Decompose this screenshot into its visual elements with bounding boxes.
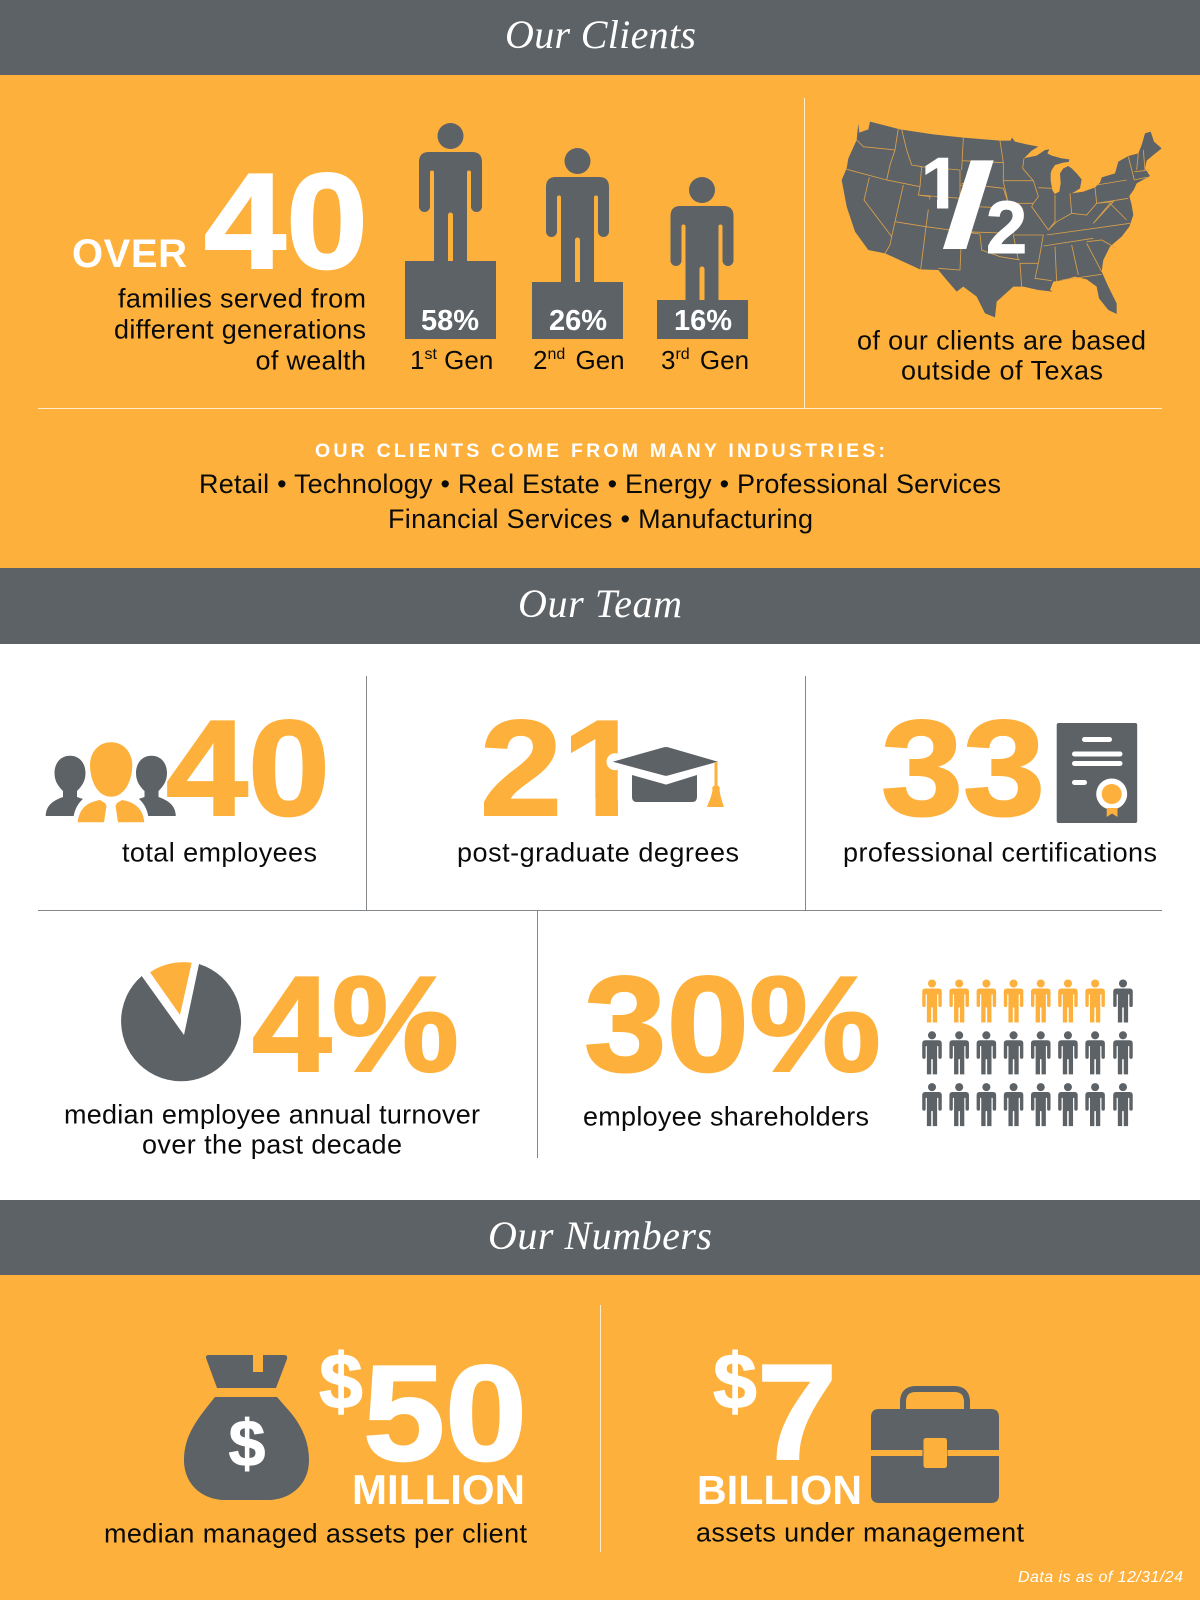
- stat: 33 professional certifications: professional certifications: [843, 838, 1157, 868]
- stat: $7 billion: 7: [757, 1336, 837, 1488]
- stat: 40 total employees: total employees: [122, 838, 317, 868]
- text block: industries: OUR CLIENTS COME FROM MANY INDUSTRIES:: [315, 440, 885, 462]
- stat: over 40 families: different generations: [114, 314, 366, 344]
- first generation figure: st: [424, 346, 437, 363]
- stat: 40 total employees: 40: [166, 692, 330, 844]
- map: half of clients outside Texas: 1: [921, 144, 961, 224]
- stat: $7 billion: [696, 1336, 1024, 1548]
- heading: Our Clients: Our Clients: [505, 12, 696, 57]
- stat: 21 post-graduate degrees: [457, 692, 739, 868]
- third generation figure: rd: [675, 346, 690, 363]
- stat: 30% shareholders: 30%: [584, 948, 881, 1100]
- chart: generations: [405, 123, 749, 375]
- stat: over 40 families: 40: [204, 145, 368, 297]
- icon: certificate: [1057, 723, 1137, 823]
- chart: pie turnover: [121, 962, 241, 1081]
- heading: Our Team: [0, 568, 1200, 644]
- icon: money bag: $: [229, 1406, 265, 1480]
- third generation figure: [657, 177, 749, 375]
- stat: 21 post-graduate degrees: post-graduate degrees: [457, 838, 739, 868]
- second generation figure: nd: [547, 346, 565, 363]
- third generation figure: 16%: [674, 305, 732, 337]
- heading: Our Numbers: Our Numbers: [488, 1213, 712, 1258]
- map: half of clients outside Texas: /: [941, 140, 996, 272]
- second generation figure: 26%: [549, 305, 607, 337]
- stat: over 40 families: families served from: [118, 284, 366, 314]
- icon: briefcase: [871, 1389, 999, 1503]
- stat: 4% turnover: median employee annual turnover: [64, 1100, 480, 1130]
- stat: 4% turnover: over the past decade: [142, 1130, 402, 1160]
- first generation figure: 1: [410, 345, 424, 375]
- icon: three people: [46, 738, 176, 824]
- stat: over 40 families: of wealth: [256, 346, 366, 376]
- heading: Our Team: Our Team: [518, 581, 682, 626]
- chart: people grid: [922, 979, 1133, 1126]
- map: half of clients outside Texas: 2: [986, 186, 1027, 269]
- stat: $50 million: median managed assets per client: [104, 1518, 527, 1548]
- map: half of clients outside Texas: outside of Texas: [901, 356, 1103, 386]
- second generation figure: Gen: [568, 345, 625, 375]
- stat: 33 professional certifications: 33: [881, 692, 1045, 844]
- stat: $50 million: 50: [363, 1337, 527, 1489]
- heading: Our Numbers: [0, 1200, 1200, 1275]
- first generation figure: 58%: [421, 305, 479, 337]
- first generation figure: [405, 123, 496, 375]
- stat: $50 million: [104, 1337, 527, 1548]
- text block: industries: [199, 440, 1001, 534]
- heading: Our Clients: [0, 0, 1200, 75]
- third generation figure: Gen: [693, 345, 749, 375]
- stat: 4% turnover: 4%: [252, 948, 459, 1100]
- stat: $7 billion: BILLION: [697, 1467, 862, 1513]
- map: half of clients outside Texas: of our clients are based: [857, 326, 1146, 356]
- second generation figure: 2: [533, 345, 547, 375]
- text block: industries: Financial Services • Manufacturing: [388, 504, 813, 534]
- panel: our team: [0, 568, 1200, 1160]
- stat: $7 billion: assets under management: [696, 1518, 1024, 1548]
- icon: graduation cap: [606, 747, 724, 807]
- stat: over 40 families: [72, 145, 368, 376]
- stat: $50 million: $: [319, 1337, 363, 1425]
- stat: 30% shareholders: employee shareholders: [583, 1102, 869, 1132]
- footnote: Data is as of 12/31/24: [1018, 1569, 1183, 1586]
- second generation figure: [532, 148, 625, 375]
- panel: our numbers: [0, 1200, 1200, 1600]
- stat: 30% shareholders: [583, 948, 1133, 1132]
- stat: 4% turnover: [64, 948, 480, 1160]
- stat: 33 professional certifications: [843, 692, 1157, 868]
- stat: 21 post-graduate degrees: 21: [480, 692, 644, 844]
- icon: money bag: [184, 1355, 309, 1500]
- stat: $7 billion: $: [713, 1337, 757, 1425]
- panel: our clients: [0, 0, 1200, 568]
- third generation figure: 3: [661, 345, 675, 375]
- first generation figure: Gen: [437, 345, 493, 375]
- stat: 40 total employees: [46, 692, 330, 868]
- map: half of clients outside Texas: [842, 122, 1162, 386]
- stat: over 40 families: OVER: [72, 232, 187, 276]
- text block: industries: Retail • Technology • Real Estate • Energy • Professional Services: [199, 469, 1001, 499]
- stat: $50 million: MILLION: [352, 1466, 525, 1513]
